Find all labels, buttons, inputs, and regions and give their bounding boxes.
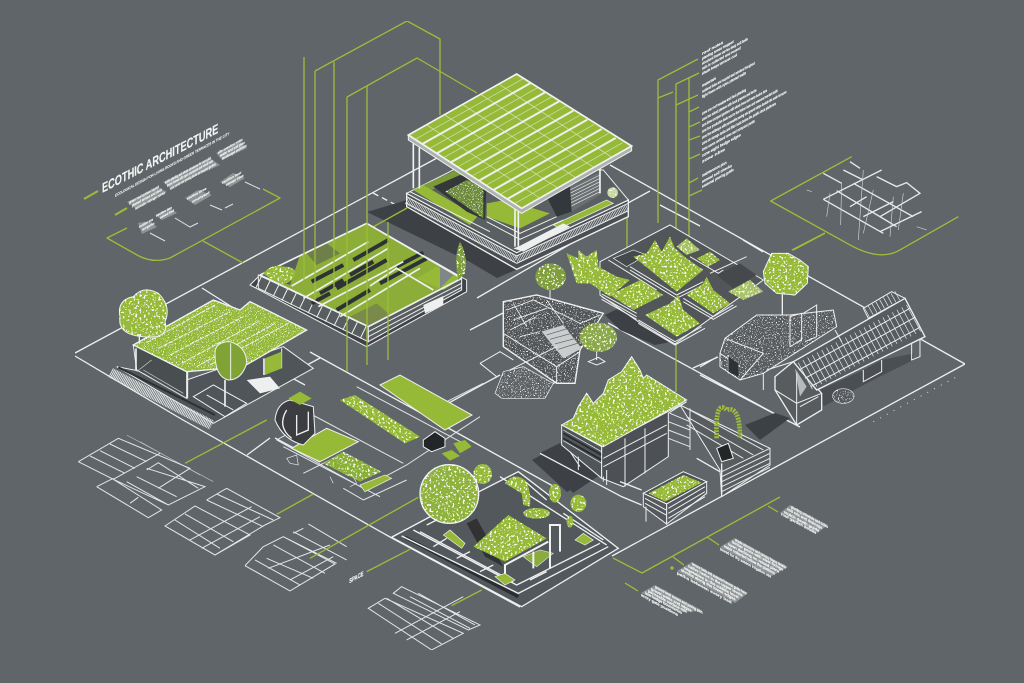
bed <box>473 515 547 562</box>
tree 1 <box>119 290 167 343</box>
roof stripes <box>147 305 288 367</box>
dark pool <box>613 250 647 267</box>
text blocks <box>127 138 247 211</box>
site ground lines <box>75 158 965 607</box>
walls <box>133 345 187 398</box>
notes table <box>702 87 787 164</box>
sketch lines <box>507 300 600 337</box>
plot outline <box>277 383 483 500</box>
big tree <box>420 465 479 523</box>
notes 1: mulch depth guide <box>784 509 820 534</box>
notes 4: permeable surface mix <box>648 588 687 615</box>
barn roof <box>793 292 925 390</box>
lower left drawings <box>78 375 483 650</box>
columns <box>413 143 600 247</box>
building: terraced gardens <box>535 225 763 345</box>
left shrub <box>263 266 295 284</box>
dark cube <box>423 432 445 452</box>
text blocks: rainwater storage zones <box>135 191 165 211</box>
notes block D: annual soil checks <box>702 162 733 184</box>
plot base <box>111 347 313 425</box>
small beds <box>453 440 472 453</box>
pavilion base <box>407 193 628 269</box>
notes table: zone six storage tanks and filter beds below the public deck platforms <box>702 100 776 146</box>
callout frame <box>771 157 958 255</box>
notes 3: shrubs along the lower edges <box>681 567 736 602</box>
plan 3 <box>245 524 347 591</box>
notes block A: planting zones mapped <box>702 38 734 61</box>
notes 2 <box>720 537 788 579</box>
notes table: zone seven orchard rows and compost yards <box>702 118 755 152</box>
dark opening <box>547 187 572 217</box>
green planter strip <box>413 185 477 225</box>
notes block B: light frame with open planted walls <box>702 70 746 99</box>
ridge lines <box>260 223 462 327</box>
ground shadows <box>367 200 790 493</box>
arch foliage <box>716 407 740 438</box>
notes block A: rain is collected and reused <box>702 45 741 71</box>
dark pool right <box>717 263 757 288</box>
notes block D: maintenance plan <box>702 159 727 178</box>
shadow <box>467 518 503 567</box>
green roof <box>562 357 687 447</box>
notes block A: structural frame carries deep soil beds <box>702 36 748 66</box>
text blocks: green roof system layout <box>129 184 159 205</box>
platform <box>392 472 618 607</box>
planter <box>643 472 707 524</box>
plan label: SPACE <box>349 570 364 586</box>
notes block B: reclaimed timber and recycled steel members throughout <box>702 60 755 94</box>
notes block A: roof notes <box>702 39 723 56</box>
notes block A: shade keeps terraces cool <box>702 52 737 76</box>
main walls <box>562 402 687 487</box>
wireframe ticks <box>807 170 927 240</box>
notes 2: stored for dry season irrigation use <box>720 546 772 579</box>
trees <box>473 464 586 528</box>
notes 3: paths between every bed <box>677 570 732 605</box>
building: green roof house <box>111 290 313 425</box>
vertical leader lines <box>304 57 388 372</box>
notes 4: entry gate positions <box>641 592 678 617</box>
title dash <box>84 191 127 215</box>
notes 2: shade structure and canopy frame details <box>735 537 786 570</box>
machine <box>275 392 315 445</box>
bed top <box>677 238 700 255</box>
notes 3 <box>677 561 748 605</box>
notes 3: vegetables in the middle level <box>684 565 739 600</box>
dark slots <box>312 240 427 310</box>
leader dot <box>670 566 674 570</box>
notes table: zone three courtyard gardens with shade trees and water basins here <box>702 87 767 128</box>
text blocks: landscape sections <box>222 144 247 161</box>
long strip <box>340 395 420 443</box>
building: garden plot <box>392 464 618 607</box>
white end block <box>423 296 443 313</box>
columns <box>225 358 264 407</box>
louvre panel <box>570 172 600 212</box>
panel: right detail plan <box>771 157 958 255</box>
small tree <box>580 323 617 365</box>
small figures: section three <box>187 186 206 201</box>
round tree <box>535 263 566 298</box>
shrub <box>833 389 854 403</box>
notes 3: terrace beds and seasonal harvest guide here <box>692 561 747 596</box>
notes 3: native herbs in the upper levels <box>688 563 743 598</box>
barn walls <box>763 340 920 425</box>
notes leader <box>613 497 780 591</box>
roof edge <box>408 135 632 213</box>
notes table: zone two raised planters with local grasses and herbs <box>702 87 757 122</box>
plan 2 <box>165 488 280 555</box>
notes 2: open decking on raised piers <box>728 541 779 574</box>
notes block D: seasonal pruning guide <box>702 166 734 189</box>
text blocks: native planting and shade structures for every plot <box>165 156 211 185</box>
gray panels <box>260 255 300 285</box>
bed 4 <box>687 277 730 313</box>
notes 1: roof garden details <box>781 511 816 535</box>
building: green roof block <box>540 357 770 524</box>
notes 2: water collected below the platform <box>723 543 775 576</box>
green wall <box>265 352 282 375</box>
back strip <box>423 170 463 190</box>
leader lines to the central buildings <box>315 21 825 257</box>
green roof <box>408 74 632 208</box>
notes table: zone eight hedge edges <box>702 132 741 158</box>
sketch house body <box>503 295 603 383</box>
green floor <box>487 200 550 228</box>
tree 2 <box>215 342 247 380</box>
title: ECOTHIC ARCHITECTURE <box>102 121 218 196</box>
small figures <box>138 170 245 234</box>
frame <box>505 525 560 574</box>
floor lines <box>410 192 563 239</box>
notes 4: ground level access and paving plan <box>655 584 703 615</box>
leader tree <box>658 59 702 392</box>
rubble <box>495 367 553 398</box>
courtyard path <box>540 453 722 505</box>
plan 4 <box>368 587 480 650</box>
right deck <box>668 405 770 497</box>
green bed large <box>292 428 358 462</box>
small figures: raised bed <box>160 208 174 220</box>
text blocks: timber frames with open courtyards and raised beds <box>167 159 213 188</box>
panel: top-left title callout <box>84 121 280 263</box>
walls <box>480 303 580 383</box>
base <box>250 223 467 347</box>
plan 1 <box>78 435 213 518</box>
text blocks: site overview notes <box>218 138 243 155</box>
small figures: canopy trees <box>226 173 244 187</box>
building: striped greenhouse <box>250 223 467 347</box>
small figures: section two <box>156 205 172 218</box>
planted beds <box>610 237 763 337</box>
small figures <box>287 455 357 487</box>
courtyard <box>193 348 282 417</box>
side wall <box>258 275 462 342</box>
small figures: section four <box>222 170 242 185</box>
small leaders <box>150 182 260 241</box>
notes 1: soil mix and drainage <box>787 506 823 531</box>
hatched roof <box>542 325 582 358</box>
planted roof <box>260 223 462 327</box>
notes table: zone five walkways with permeable paving and gravel strips beside the main terraces <box>702 89 787 140</box>
notes 4: gravel walks and edges <box>651 586 691 613</box>
small figures: courtyard <box>192 190 210 204</box>
top bed <box>380 375 472 430</box>
bed large <box>633 237 703 292</box>
barn shadow <box>820 353 913 407</box>
notes 2: timber posts with steel fixings <box>732 539 783 572</box>
text blocks: solar panels over growing decks and seasonal gardens <box>170 162 216 191</box>
terrace platform <box>600 225 763 344</box>
notes 4: low hedge boundaries <box>645 590 682 615</box>
text blocks: water and soil plan <box>219 140 245 158</box>
wireframe plan <box>823 162 922 233</box>
green strip right <box>553 200 613 228</box>
notes 1 <box>780 504 828 535</box>
building: solar canopy pavilion <box>407 74 632 269</box>
notes block B: materials <box>702 75 716 88</box>
bed small <box>697 252 720 267</box>
subtitle: ECOLOGICAL DESIGN FOR LIVING ROOFS AND GREEN TERRACES IN THE CITY <box>115 131 230 198</box>
roof panel lines <box>415 78 623 204</box>
dark bin <box>717 443 733 462</box>
sketch house <box>720 305 837 380</box>
notes table: zone nine <box>702 146 726 164</box>
small figures: section one <box>139 217 153 229</box>
terrace step lines <box>602 257 747 345</box>
green roof <box>133 300 307 372</box>
green strip <box>323 452 382 482</box>
small beds <box>443 530 593 585</box>
text blocks: planted terrace and deck <box>132 187 163 208</box>
notes 1: planting schedule and notes <box>791 504 828 529</box>
bed 3 <box>645 295 700 337</box>
building: sketch ruin <box>480 295 617 398</box>
bed 2 <box>610 280 663 310</box>
panel: top-right notes <box>658 36 787 392</box>
small figures: roof garden <box>142 221 154 232</box>
white floor <box>513 223 570 252</box>
foliage tree <box>567 250 630 297</box>
green small <box>360 475 392 492</box>
callout frame <box>107 189 280 263</box>
tree <box>763 253 808 315</box>
notes 4 <box>641 584 703 617</box>
panel: bottom-right notes <box>613 497 828 617</box>
notes table: zone one roof meadow and deck planting <box>702 87 746 116</box>
plan leaders <box>185 420 482 606</box>
building: timber barn <box>720 253 960 425</box>
small shrub <box>607 187 618 198</box>
white floor <box>247 377 280 393</box>
slim tree near pavilion <box>456 242 466 280</box>
dark interior <box>433 175 487 220</box>
dimension ticks <box>873 375 960 422</box>
building: planting beds <box>275 375 483 500</box>
notes table: zone four productive beds next to the timber barn and seasonal market stalls <box>702 88 778 134</box>
planted panel <box>445 180 483 218</box>
bed far right <box>728 280 763 300</box>
pavilion floor <box>407 167 628 253</box>
